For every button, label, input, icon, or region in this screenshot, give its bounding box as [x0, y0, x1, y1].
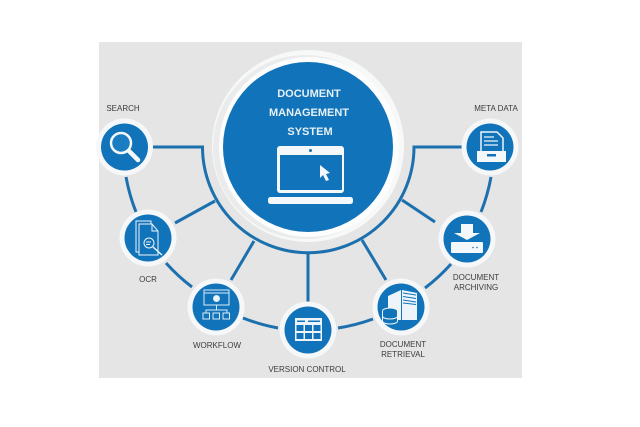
label: document archiving: DOCUMENT — [453, 273, 499, 282]
node: document retrieval — [372, 278, 430, 336]
node: search — [96, 118, 153, 176]
node: meta data — [462, 118, 518, 176]
node: version control — [280, 302, 336, 358]
label: search: SEARCH — [106, 104, 140, 113]
node: ocr — [120, 210, 176, 266]
central circle: document management system: MANAGEMENT — [269, 107, 349, 119]
label: version control: VERSION CONTROL — [268, 365, 346, 374]
icon: document tray — [477, 132, 506, 162]
icon: laptop — [268, 146, 353, 204]
icon: table grid — [295, 318, 322, 341]
icon: download to drive — [451, 224, 483, 253]
label: workflow: WORKFLOW — [193, 341, 241, 350]
background panel — [99, 42, 522, 378]
icon: workflow tree — [203, 290, 230, 319]
node: document archiving — [438, 210, 496, 268]
central circle: document management system — [212, 50, 404, 242]
central title: DOCUMENT — [277, 88, 341, 100]
icon: document scan — [136, 221, 162, 255]
label: document retrieval: DOCUMENT — [380, 340, 426, 349]
label: document retrieval: RETRIEVAL — [381, 350, 425, 359]
label: ocr: OCR — [139, 275, 157, 284]
connector network — [126, 147, 491, 328]
label: document archiving: ARCHIVING — [454, 283, 498, 292]
icon: magnifier — [111, 133, 138, 160]
icon: server with database — [382, 290, 417, 324]
node: workflow — [188, 278, 244, 336]
label: meta data: META DATA — [474, 104, 518, 113]
central circle: document management system: SYSTEM — [287, 126, 333, 138]
